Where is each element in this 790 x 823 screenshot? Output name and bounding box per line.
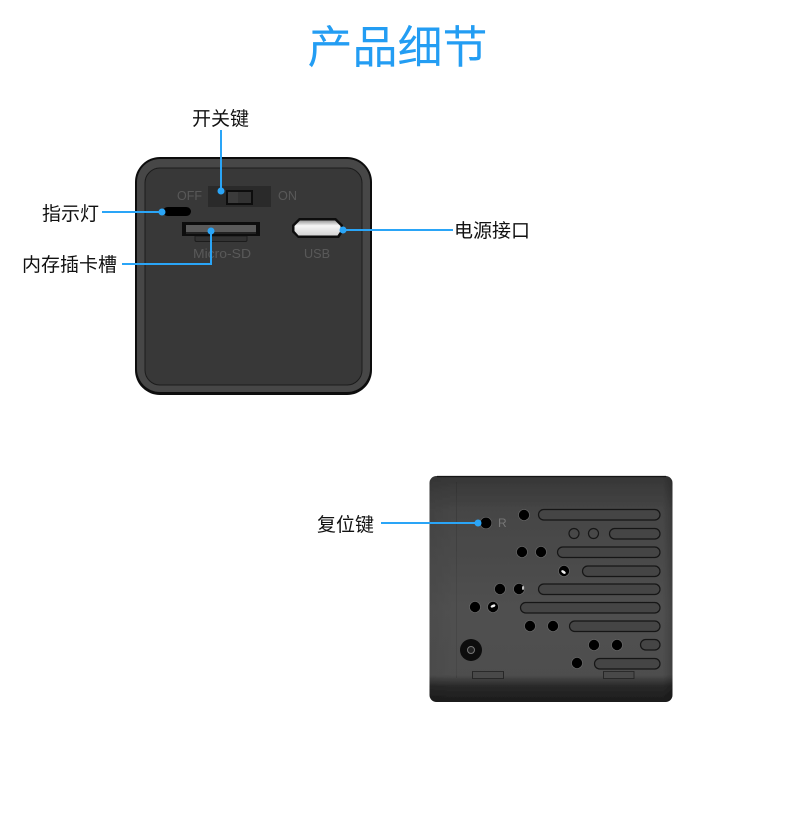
reset letter R: R bbox=[498, 516, 507, 530]
micro-sd slot bbox=[182, 222, 260, 242]
callout: power port: 电源接口 bbox=[454, 220, 530, 242]
callout: memory card slot bbox=[22, 228, 214, 276]
switch text ON: ON bbox=[278, 188, 297, 203]
callout: reset key bbox=[317, 514, 482, 536]
switch text OFF: OFF bbox=[177, 188, 202, 203]
usb port bbox=[292, 218, 343, 238]
callout: reset key: 复位键 bbox=[317, 514, 374, 536]
callout: power switch: 开关键 bbox=[192, 108, 249, 130]
micro-sd text: Micro-SD bbox=[193, 246, 251, 261]
indicator light bbox=[163, 207, 191, 216]
hole highlights bbox=[490, 570, 566, 608]
reset hole bbox=[480, 517, 492, 529]
callout: indicator bbox=[42, 203, 166, 225]
callout: memory card slot: 内存插卡槽 bbox=[22, 254, 117, 276]
outlined holes bbox=[569, 528, 598, 538]
callout: power port bbox=[340, 220, 530, 242]
device body bbox=[430, 476, 672, 702]
power switch bbox=[208, 186, 271, 207]
callout: indicator: 指示灯 bbox=[42, 203, 99, 225]
callout: power switch bbox=[192, 108, 249, 194]
ventilation slots bbox=[520, 510, 660, 669]
panel: side view of device bbox=[430, 476, 672, 702]
panel: back view of device bbox=[135, 157, 372, 395]
bottom tabs bbox=[472, 672, 634, 678]
device body bbox=[135, 157, 372, 395]
speaker holes bbox=[470, 510, 622, 668]
dc jack bbox=[460, 639, 482, 661]
title: 产品细节 bbox=[307, 22, 488, 73]
usb text: USB bbox=[304, 246, 330, 261]
